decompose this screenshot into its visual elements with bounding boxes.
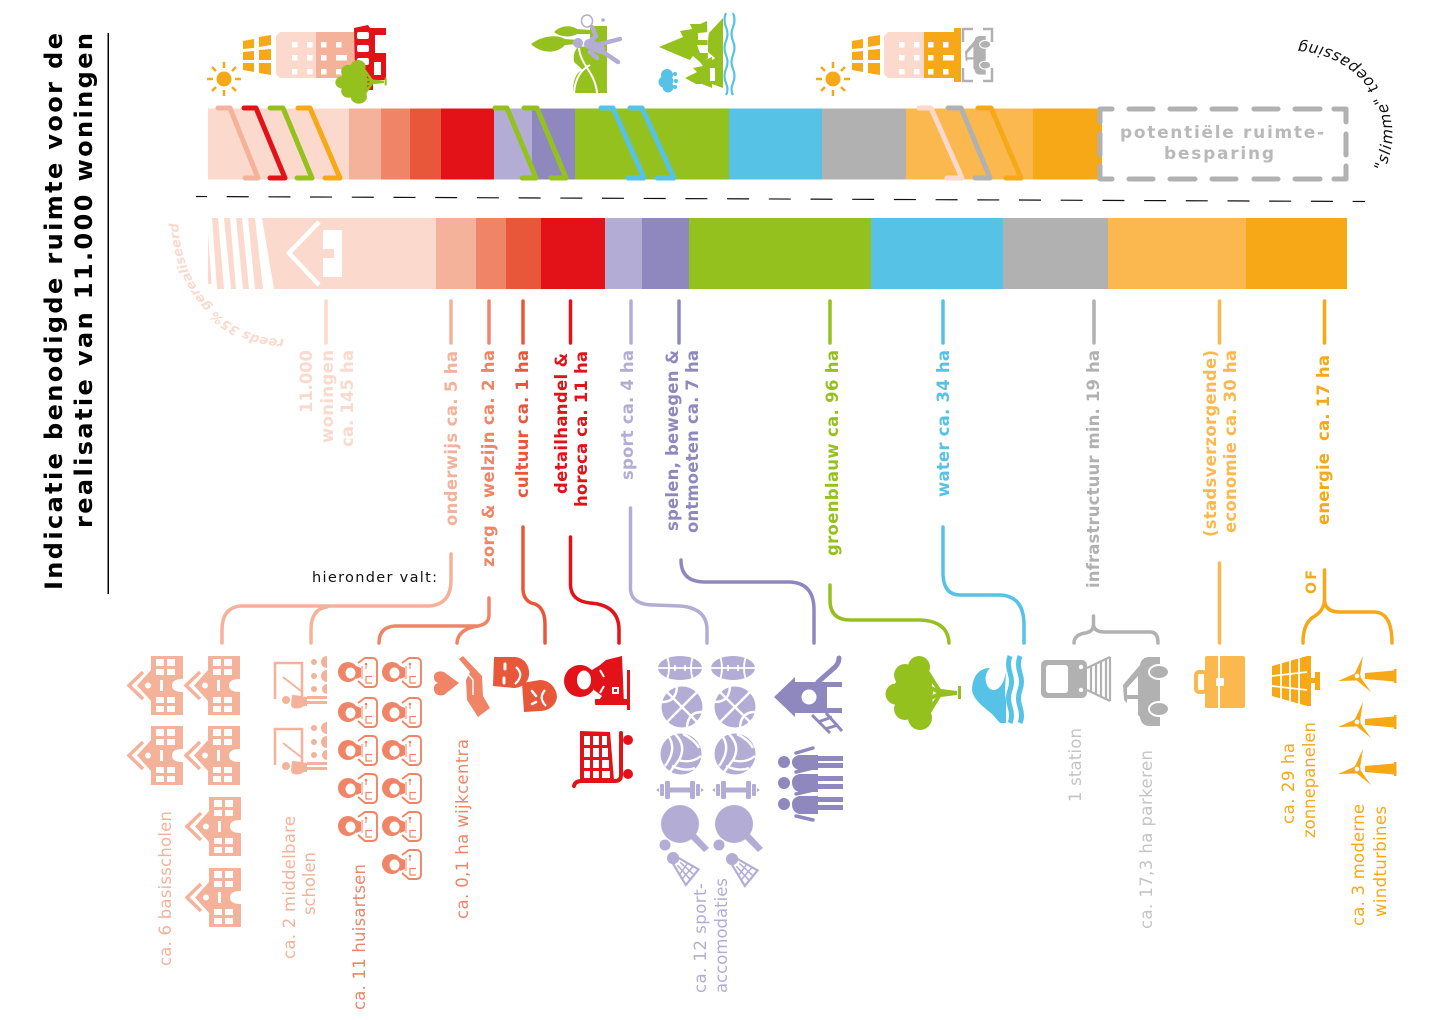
label: zorg en welzijn: zorg & welzijn ca. 2 ha [479,350,498,567]
label: zorg en welzijn [379,301,498,643]
label: homes: woningen [318,350,337,443]
icon: shopkeeper [564,656,630,710]
text: huisartsen: ca. 11 huisartsen [350,864,369,1010]
top icon: green plant with sporting person [531,15,620,93]
label: groenblauw [823,301,949,643]
icon: car [1123,657,1169,726]
dashed box: potential space saving: besparing [1164,144,1274,164]
label: energie: energie ca. 17 ha [1314,355,1333,525]
title [40,33,98,590]
dashed box: potential space saving: potentiële ruimte- [1120,123,1324,143]
label: onderwijs [222,301,461,643]
stripes: realised homes [207,218,274,289]
icon: group of people [778,748,843,820]
icons: sport accommodations [656,656,763,886]
icon: heart in hand [434,656,490,717]
label: spelen, bewegen en ontmoeten: spelen, bewegen & [663,350,682,531]
text: middelbare scholen: ca. 2 middelbare [280,816,299,959]
icon: train [1041,657,1110,701]
text: station: 1 station [1066,728,1085,802]
label: homes: 11.000 [297,350,316,413]
text: zonnepanelen: zonnepanelen [1300,722,1319,838]
label: detailhandel en horeca [552,301,619,643]
label: stadsverzorgende economie: economie ca. 30 ha [1221,350,1240,533]
label: spelen, bewegen en ontmoeten [663,301,814,643]
stacked bar: required space [207,218,1347,289]
text: sport accommodations: ca. 12 sport- [691,883,710,993]
text: basisscholen: ca. 6 basisscholen [156,811,175,966]
icons: huisartsen [338,658,421,879]
text: wijkcentra: ca. 0,1 ha wijkcentra [453,739,472,919]
icon: briefcase [1196,656,1245,708]
icon: solar panel [1272,656,1320,706]
text: hieronder valt: hieronder valt: [312,570,437,586]
title: realisatie van 11.000 woningen [70,33,98,528]
text: middelbare scholen: scholen [300,852,319,915]
icon: theatre masks [493,657,557,712]
label: stadsverzorgende economie: (stadsverzorgende) [1201,350,1220,537]
text: windturbines: ca. 3 moderne [1349,804,1368,926]
text: sport accommodations: accomodaties [712,878,731,993]
text: windturbines: windturbines [1371,806,1390,917]
icon: shopping cart [574,731,633,786]
label: cultuur: cultuur ca. 1 ha [513,350,532,498]
text: zonnepanelen [1279,722,1319,838]
stacked bar: with smart application [208,108,1102,180]
brackets: overlap markers [218,108,1021,178]
text: zonnepanelen: ca. 29 ha [1279,743,1298,824]
icons: basisscholen [129,656,241,927]
label: water [934,301,1024,643]
top icon: houses with sun, windows, economy and car [816,28,992,96]
text: sport accommodations [691,878,731,993]
label: homes: ca. 145 ha [338,350,357,447]
label: infrastructuur [1074,301,1158,643]
top icon: houses with sun, windows, shop and tree [207,25,387,104]
label: sport: sport ca. 4 ha [618,350,637,480]
icon: playground house [774,658,842,733]
label: cultuur [513,301,545,643]
icons: wind turbines [1338,656,1396,785]
label: groenblauw: groenblauw ca. 96 ha [823,350,842,556]
label: energie: OF [1304,570,1320,594]
text: windturbines [1349,804,1390,926]
title: Indicatie benodigde ruimte voor de [40,33,68,590]
label: energie [1303,301,1392,643]
curved text: slimme toepassing: "slimme" toepassing [1298,40,1392,168]
dashed box: potential space saving [1100,109,1346,179]
top icon: fir trees, rain cloud and water [658,13,734,95]
label: spelen, bewegen en ontmoeten: ontmoeten ca. 7 ha [683,350,702,533]
label: infrastructuur: infrastructuur min. 19 ha [1084,350,1103,588]
label: homes [297,301,357,447]
label: water: water ca. 34 ha [934,350,953,497]
label: sport [618,301,707,643]
curved text: reeds 35% gerealiseerd: reeds 35% gerealiseerd [168,224,284,346]
text: parkeren: ca. 17,3 ha parkeren [1137,750,1156,929]
icons: middelbare scholen [275,656,327,774]
icon: wave [972,656,1022,723]
label: detailhandel en horeca: detailhandel & [552,353,571,494]
label: stadsverzorgende economie [1201,301,1240,643]
text: middelbare scholen [280,816,319,959]
label: onderwijs: onderwijs ca. 5 ha [442,351,461,526]
label: detailhandel en horeca: horeca ca. 11 ha [572,351,591,507]
icon: house in bar [289,222,342,285]
icon: tree [886,656,961,730]
